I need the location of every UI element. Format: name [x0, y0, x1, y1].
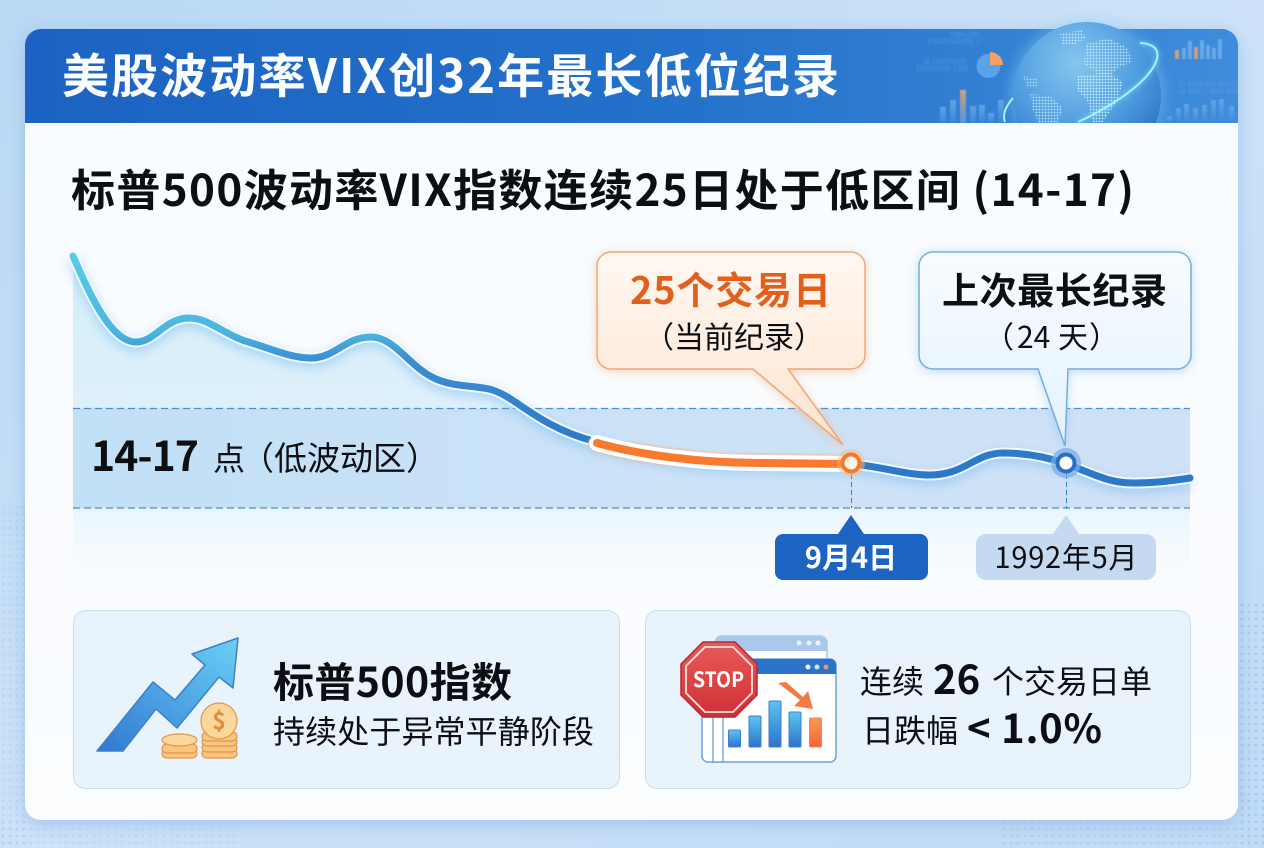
header decoration: charts and data text: 10061245 [949, 30, 980, 40]
header banner [25, 16, 1238, 123]
panel text line 2: 日跌幅 [862, 706, 958, 752]
header decoration: charts and data text [916, 30, 1244, 123]
callout: previous record: 天 [1058, 313, 1088, 357]
date tag: 1992年5月: 1992年5月 [994, 535, 1138, 577]
band label: 14-17 [91, 423, 199, 483]
header title: 美股波动率VIX创32年最长低位纪录 [62, 38, 839, 107]
header decoration: charts and data text: 110042582405 17 [927, 37, 983, 47]
callout: previous record [919, 252, 1191, 446]
band label [91, 423, 439, 483]
panel: daily decline [646, 610, 1190, 788]
panel text line 2: < 1.0% [967, 697, 1102, 755]
panel heading: 标普500指数 [273, 649, 512, 709]
pie chart icon [976, 52, 1003, 78]
callout: previous record: 24 [1017, 313, 1057, 357]
callout: previous record: 上次最长纪录 [942, 261, 1167, 315]
icon: rising arrow with coins: $ [212, 702, 226, 736]
volatility curve [73, 256, 1190, 483]
low volatility band [73, 408, 1190, 508]
icon: stop sign with browser chart [681, 636, 836, 762]
area below band [73, 508, 1190, 598]
header decoration: charts and data text: 1K 80215 5000 000 [1178, 87, 1238, 97]
date tag: 9月4日 [775, 515, 928, 580]
area under curve [73, 256, 593, 441]
callout: previous record: （ [984, 313, 1014, 357]
marker: previous record [1051, 448, 1081, 478]
date tag: 1992年5月 [976, 515, 1156, 580]
globe [1003, 16, 1168, 123]
callout: previous record: ） [1089, 313, 1119, 357]
band label: （低波动区） [241, 432, 439, 480]
panel text: 持续处于异常平静阶段 [273, 707, 594, 753]
panel text line 1: 个交易日单 [992, 657, 1152, 703]
header decoration: charts and data text: 16 4010 003 DAFFED [1178, 80, 1244, 90]
current record segment [597, 443, 851, 464]
header decoration: charts and data text: 1K 100101050 [922, 57, 967, 67]
marker drop lines [852, 474, 1066, 508]
icon: stop sign with browser chart: STOP [693, 664, 744, 694]
panel text line 1: 连续 [860, 657, 924, 703]
chart subtitle: 标普500波动率VIX指数连续25日处于低区间 (14-17) [71, 155, 1134, 219]
band label: 点 [213, 434, 245, 480]
line chart [73, 256, 1190, 598]
curve glow [73, 260, 1190, 487]
marker: current record [837, 449, 865, 477]
callout: current record: （当前纪录） [644, 313, 824, 357]
header decoration: charts and data text: 101002050 1305 [916, 64, 968, 74]
panel: S&P 500 [74, 610, 620, 788]
icon: rising arrow with coins [97, 638, 238, 758]
panel text line 1: 26 [933, 648, 980, 706]
callout: current record: 25个交易日 [630, 260, 831, 315]
callout: current record [597, 252, 865, 445]
date tag: 9月4日: 9月4日 [805, 535, 897, 577]
